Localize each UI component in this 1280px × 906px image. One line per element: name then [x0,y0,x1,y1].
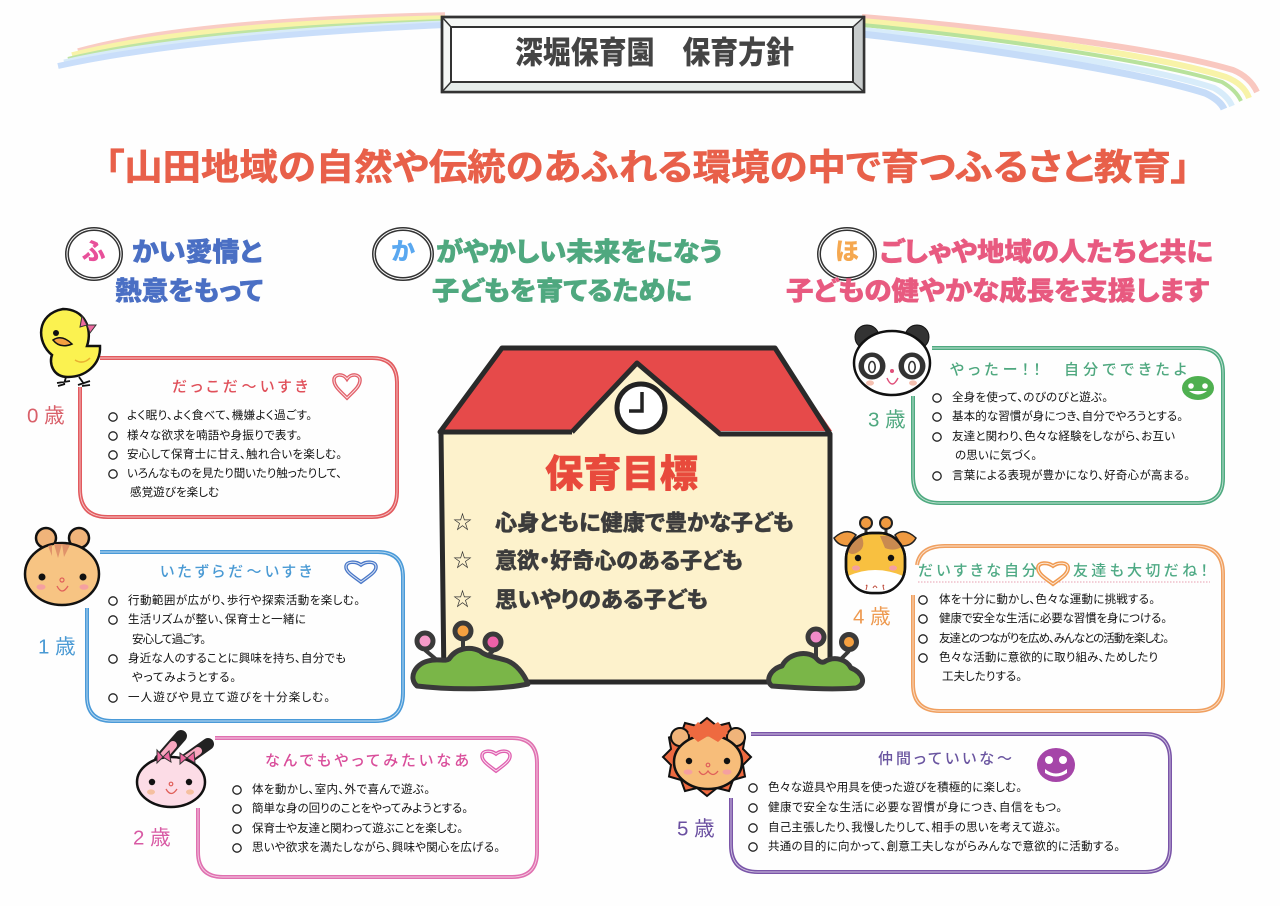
panel title: 仲間っていいな～ [878,750,1012,768]
childcare goals: 思いやりのある子ども [495,588,708,612]
bullet list: 工夫したりする。 [942,670,1022,683]
icon: heart [1038,563,1068,584]
panel title: 友達も大切だね！ [1073,562,1208,580]
icon: smiley [1037,748,1075,782]
policy: warm love [67,229,263,306]
bullet list: の思いに気づく。 [955,448,1037,462]
bullet list: 基本的な習慣が身につき、自分でやろうとする。 [952,409,1183,423]
childcare goals: ☆ [453,512,472,534]
age label: 1 歳 [38,636,76,658]
age label: 2 歳 [133,826,171,850]
main slogan: 「山田地域の自然や伝統のあふれる環境の中で育つふるさと教育」 [105,146,1190,188]
policy: bright future: がやかしい未来をになう [436,237,722,267]
policy: guardians and community: 子どもの健やかな成長を支援します [786,276,1209,306]
icon: chick [41,309,100,386]
title plate: 深堀保育園 保育方針 [515,36,794,70]
panel: age 0 [27,358,397,517]
policy: bright future: か [391,238,415,266]
icon: hamster [25,528,99,605]
icon: flowers and bush left [413,623,528,689]
title plate [442,17,864,92]
panel: age 5 [677,734,1170,872]
policy: guardians and community [786,229,1213,306]
age label: 3 歳 [868,408,906,432]
policy: guardians and community: ごしゃや地域の人たちと共に [880,237,1213,267]
bullet list: 一人遊びや見立て遊びを十分楽しむ。 [128,690,330,704]
icon: flowers and bush right [769,629,863,689]
bullet list: 体を十分に動かし、色々な運動に挑戦する。 [939,592,1155,606]
bullet list: 友達とのつながりを広め、みんなとの活動を楽しむ。 [939,631,1169,645]
icon: panda [854,325,930,395]
bullet list: 様々な欲求を喃語や身振りで表す。 [127,428,302,442]
bullet list: 自己主張したり、我慢したりして、相手の思いを考えて遊ぶ。 [768,820,1061,834]
policy: bright future [374,229,722,306]
bullet list: 色々な遊具や用具を使った遊びを積極的に楽しむ。 [768,780,1022,794]
bullet list: 全身を使って、のびのびと遊ぶ。 [952,390,1108,404]
childcare goals: 心身ともに健康で豊かな子ども [495,510,794,536]
icon: smiley [1182,376,1214,400]
rainbow left [58,15,445,66]
bullet list: 健康で安全な生活に必要な習慣を身につける。 [939,611,1167,625]
panel: age 4 [853,546,1223,711]
bullet list [933,390,1190,482]
icon: lion [663,718,751,796]
bullet list: 安心して保育士に甘え、触れ合いを楽しむ。 [127,447,342,461]
policy: warm love: ふ [82,238,106,266]
panel title [918,562,1210,582]
bullet list: 安心して過ごす。 [132,632,206,646]
childcare goals: 意欲・好奇心のある子ども [495,548,743,574]
bullet list [109,593,360,704]
bullet list: 友達と関わり、色々な経験をしながら、お互い [952,429,1175,443]
bullet list: 健康で安全な生活に必要な習慣が身につき、自信をもつ。 [768,800,1062,814]
panel: age 2 [133,738,537,877]
bullet list [109,408,342,499]
bullet list: 感覚遊びを楽しむ [130,485,219,499]
bullet list [749,780,1120,853]
panel title: だいすきな自分 [918,562,1037,580]
bullet list: 保育士や友達と関わって遊ぶことを楽しむ。 [252,821,463,835]
policy: guardians and community: ほ [835,238,859,266]
bullet list [919,592,1169,683]
childcare goals: ☆ [453,588,472,610]
age label: 4 歳 [853,606,891,628]
panel: age 1 [38,552,403,721]
rainbow right [862,17,1257,109]
childcare goals [453,454,794,612]
policy: warm love: かい愛情と [132,237,262,267]
bullet list: 言葉による表現が豊かになり、好奇心が高まる。 [952,468,1190,482]
bullet list [233,782,500,854]
panel title: やったー！！ 自分でできたよ [950,362,1187,378]
icon: heart [482,751,510,771]
bullet list: 生活リズムが整い、保育士と一緒に [128,612,306,626]
icon: rabbit [137,736,208,807]
bullet list: 色々な活動に意欲的に取り組み、ためしたり [939,650,1158,664]
childcare goals: ☆ [453,550,472,572]
policy: warm love: 熱意をもって [115,276,263,306]
icon: school house [440,348,832,682]
bullet list: やってみようとする。 [132,671,236,684]
panel title: なんでもやってみたいなあ [265,752,469,770]
bullet list: 体を動かし、室内、外で喜んで遊ぶ。 [252,782,430,796]
policy: bright future: 子どもを育てるために [432,276,692,306]
bullet list: 簡単な身の回りのことをやってみようとする。 [252,801,468,815]
bullet list: 思いや欲求を満たしながら、興味や関心を広げる。 [252,840,500,854]
icon: giraffe [834,517,916,593]
icon: heart [346,562,376,582]
icon: clock [617,384,665,432]
panel: age 3 [868,348,1223,503]
childcare goals: 保育目標 [545,454,698,496]
age label: 5 歳 [677,818,715,840]
bullet list: いろんなものを見たり聞いたり触ったりして、 [127,466,342,480]
panel title: だっこだ～いすき [172,378,308,396]
bullet list: 行動範囲が広がり、歩行や探索活動を楽しむ。 [128,593,360,607]
bullet list: 身近な人のすることに興味を持ち、自分でも [128,651,346,665]
icon: heart [334,375,360,398]
bullet list: 共通の目的に向かって、創意工夫しながらみんなで意欲的に活動する。 [768,839,1120,853]
bullet list: よく眠り、よく食べて、機嫌よく過ごす。 [127,408,312,422]
panel title: いたずらだ～いすき [160,564,312,580]
age label: 0 歳 [27,404,65,428]
